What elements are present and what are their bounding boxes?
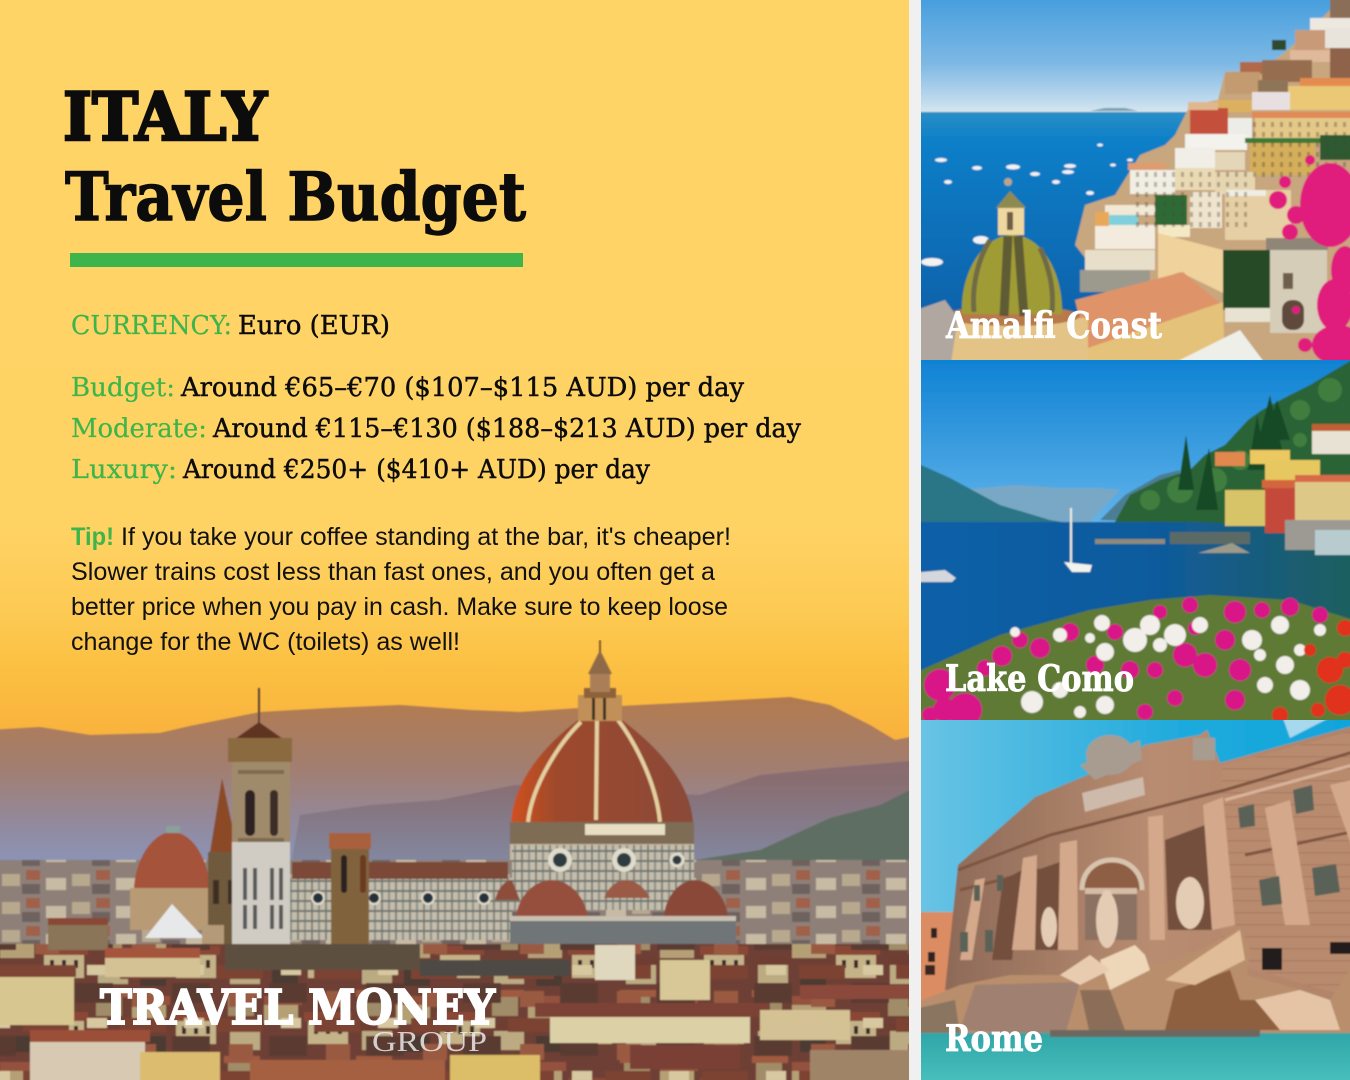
title underline	[70, 253, 523, 267]
cathedral nave	[290, 862, 512, 940]
Duomo dome	[495, 640, 736, 950]
second rooftop layer	[0, 944, 920, 1080]
left mountain	[910, 460, 1062, 522]
windows	[960, 785, 1350, 970]
tip text: Tip!	[71, 523, 114, 551]
label: Amalfi Coast: Amalfi Coast	[945, 305, 1162, 347]
clouds	[1280, 710, 1345, 738]
statues	[1041, 877, 1204, 948]
terracotta roof	[1075, 272, 1220, 350]
water	[910, 1033, 1350, 1080]
budget: luxury: Luxury:	[71, 455, 177, 485]
budget: low: Budget:	[71, 373, 175, 403]
right forested hills	[695, 785, 920, 868]
budget: moderate: Moderate:	[71, 414, 207, 444]
orange side building	[910, 912, 955, 1007]
budget: moderate: Around €115–€130 ($188–$213 AUD) per day	[212, 414, 801, 444]
title	[63, 78, 526, 236]
tip text	[71, 523, 731, 656]
currency line: CURRENCY:	[71, 311, 232, 341]
panel: Lake Como	[921, 360, 1350, 720]
logo: GROUP	[372, 1026, 487, 1058]
main dome shell	[511, 720, 693, 822]
boats	[921, 144, 1133, 266]
central niche	[1082, 860, 1142, 940]
background town	[0, 860, 920, 950]
tree highlights	[1140, 378, 1342, 510]
nearer ridge	[290, 760, 920, 880]
illustration: Florence skyline	[0, 640, 909, 1080]
attic inscription	[1082, 777, 1145, 812]
logo: TRAVEL MONEY	[100, 980, 496, 1036]
bougainvillea	[1269, 155, 1350, 365]
tip text: Slower trains cost less than fast ones, and you often get a	[71, 558, 715, 586]
main facade	[945, 724, 1350, 1000]
beach	[910, 300, 958, 370]
crenellated wall	[225, 944, 420, 970]
lantern	[578, 695, 622, 721]
sailboat	[1064, 508, 1092, 572]
tip text: change for the WC (toilets) as well!	[71, 628, 460, 656]
hillside town	[1075, 0, 1350, 370]
tower	[1266, 238, 1328, 333]
rocks	[910, 928, 1350, 1035]
label: Rome: Rome	[945, 1018, 1043, 1060]
recessed dark bays	[992, 825, 1212, 960]
budget: low: Around €65–€70 ($107–$115 AUD) per day	[180, 373, 744, 403]
small domes	[516, 880, 588, 918]
tree-covered slope	[1115, 355, 1350, 530]
distant peaks	[960, 485, 1120, 522]
currency line	[71, 311, 390, 341]
drum	[510, 822, 694, 860]
title: Travel Budget	[65, 158, 526, 236]
lower wall	[1082, 302, 1225, 370]
budget levels	[71, 373, 801, 485]
foreground rooftops	[0, 944, 920, 1080]
sculpture crest	[1080, 735, 1215, 780]
tip text: better price when you pay in cash. Make sure to keep loose	[71, 593, 728, 621]
lakeside buildings	[1095, 424, 1350, 555]
buildings left	[0, 918, 220, 1080]
budget: luxury: Around €250+ ($410+ AUD) per day	[182, 455, 650, 485]
columns	[960, 778, 1350, 960]
currency line: Euro (EUR)	[238, 311, 390, 341]
cornices	[958, 750, 1350, 890]
title: ITALY	[63, 78, 268, 156]
tip text: If you take your coffee standing at the bar, it's cheaper!	[121, 523, 731, 551]
panel: Rome	[921, 720, 1350, 1080]
buildings right	[250, 945, 920, 1080]
flower bed	[910, 595, 1350, 730]
panel: main budget panel	[0, 0, 920, 1080]
island	[1090, 108, 1138, 111]
top village houses	[1330, 0, 1350, 18]
logo	[100, 980, 496, 1058]
moored boat	[910, 570, 956, 582]
dark garden	[1223, 250, 1270, 310]
distant mountains	[0, 697, 920, 880]
Giotto's campanile	[228, 688, 292, 945]
San Lorenzo dome	[130, 826, 210, 938]
panel: Amalfi Coast	[921, 0, 1350, 360]
church wall	[1158, 233, 1223, 293]
small gothic tower	[202, 778, 240, 965]
church dome	[944, 178, 1088, 370]
label: Lake Como: Lake Como	[945, 658, 1134, 700]
stone tower	[329, 833, 371, 945]
cypresses	[1178, 395, 1290, 510]
